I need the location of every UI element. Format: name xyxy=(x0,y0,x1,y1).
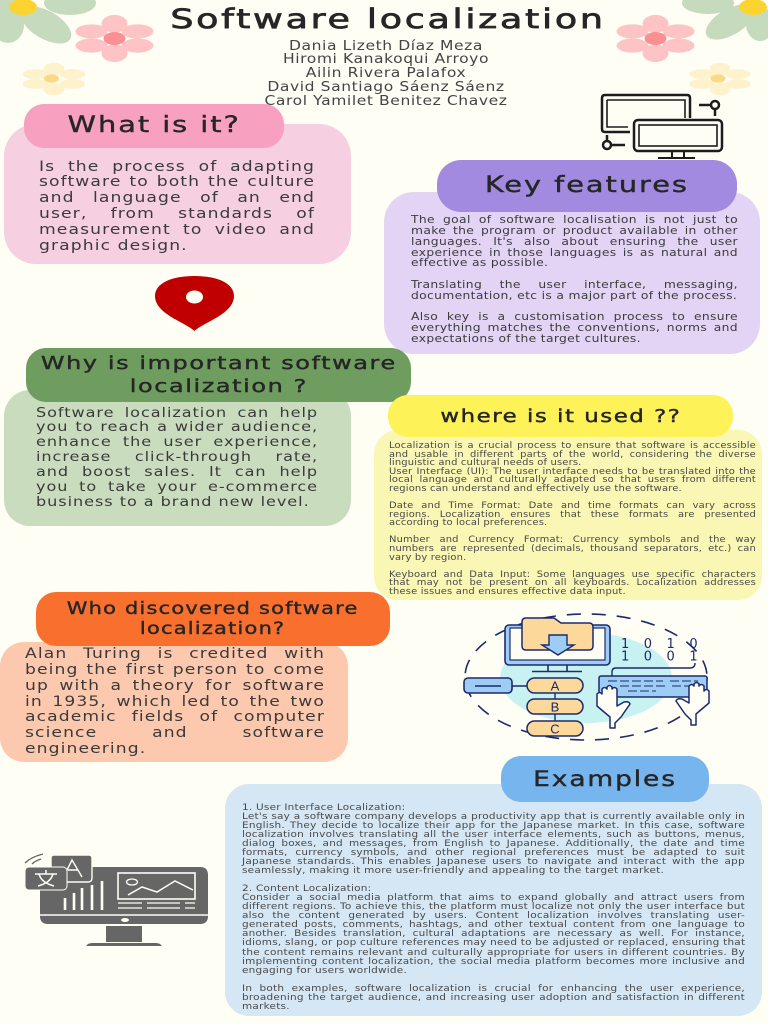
panel: key features xyxy=(384,160,760,354)
heading: Why is important software xyxy=(41,353,396,374)
text block: implementing content localization, the social media platform becomes more inclusive and xyxy=(242,956,745,967)
text block: Software localization can help xyxy=(36,404,318,420)
text block: English. They decide to localize their app for the Japanese market. In this case, software xyxy=(242,820,745,831)
panel: where is it used xyxy=(374,395,762,600)
text block: linguistic and cultural needs of users. xyxy=(389,458,581,468)
text block: and language of an end xyxy=(39,190,315,206)
text block: business to a brand new level. xyxy=(36,494,310,510)
icon: translation monitor xyxy=(24,853,208,946)
text block: formats, currency symbols, and other regional preferences must be adapted to suit xyxy=(242,847,745,858)
text block: Let's say a software company develops a productivity app that is currently available only in xyxy=(242,811,745,822)
text block: documentation, etc is a major part of the process. xyxy=(411,289,737,302)
text block: you to reach a wider audience, xyxy=(36,419,318,435)
keyboard xyxy=(612,663,695,676)
options xyxy=(527,678,583,693)
text block: software to both the culture xyxy=(39,174,315,190)
text block: the content remains relevant and culturally appropriate for users in different countries. By xyxy=(242,946,745,958)
heading xyxy=(26,348,411,402)
heading: Who discovered software xyxy=(67,598,359,618)
authors xyxy=(264,38,508,109)
text block: being the first person to come xyxy=(25,662,325,678)
icon: localization workflow: 1001 xyxy=(621,650,712,664)
text block: vary by region. xyxy=(389,553,466,563)
text block xyxy=(241,802,745,1012)
authors: David Santiago Sáenz Sáenz xyxy=(267,79,505,95)
text block: dialog boxes, and messages, from English to Japanese. Additionally, the date and time xyxy=(242,838,745,849)
decorative flowers xyxy=(0,0,768,96)
title: Software localization xyxy=(170,4,606,35)
text block: everything matches the conventions, norms and xyxy=(411,321,738,334)
icon: localization workflow: B xyxy=(551,700,559,714)
blob xyxy=(500,633,672,723)
binary: 1010 xyxy=(621,637,712,652)
text block: engineering. xyxy=(25,741,146,757)
icon: two monitors xyxy=(600,94,724,159)
text block: languages. It's also about ensuring the user xyxy=(411,235,738,248)
text block: effective as possible. xyxy=(411,256,548,269)
text block: local language and culturally adapted so that users from different xyxy=(389,475,756,485)
text block: according to local preferences. xyxy=(389,518,547,528)
text block: different regions. To achieve this, the platform must localize not only the user interface but xyxy=(242,901,745,912)
text block: up with a theory for software xyxy=(25,678,325,694)
panel background xyxy=(4,390,351,526)
text block: regions. Localization ensures that these formats are presented xyxy=(389,510,756,520)
text block: Also key is a customisation process to ensure xyxy=(411,310,738,323)
heading xyxy=(388,395,733,437)
heading: localization? xyxy=(140,619,286,639)
text block: science and software xyxy=(25,725,325,741)
hands xyxy=(597,686,630,728)
icon: localization workflow xyxy=(463,613,712,741)
text block: enhance the user experience, xyxy=(36,434,318,450)
text block: measurement to video and xyxy=(39,222,315,238)
text block: that may not be present on all keyboards. Localization addresses xyxy=(389,578,756,588)
text block xyxy=(389,441,756,597)
text block: user, from standards of xyxy=(39,206,315,222)
text block: Localization is a crucial process to ensure that software is accessible xyxy=(389,441,756,451)
text block: and boost sales. It can help xyxy=(36,464,318,480)
text block: make the program or product available in other xyxy=(411,224,738,237)
text block: Number and Currency Format: Currency symbols and the way xyxy=(389,535,756,545)
label box xyxy=(464,678,512,693)
text block: expectations of the target cultures. xyxy=(411,332,641,345)
panel background xyxy=(384,192,760,354)
icon: location pin xyxy=(155,276,234,331)
text block: graphic design. xyxy=(39,238,188,254)
panel: who discovered xyxy=(0,592,390,762)
text block: Consider a social media platform that aims to expand globally and attract users from xyxy=(242,892,745,903)
text block: you to take your e-commerce xyxy=(36,479,318,495)
heading: where is it used ?? xyxy=(440,406,681,426)
text block: academic fields of computer xyxy=(25,709,325,725)
text block: in 1935, which led to the two xyxy=(25,694,325,710)
panel background xyxy=(0,642,348,762)
text block: The goal of software localisation is not just to xyxy=(411,213,738,226)
text block: User Interface (UI): The user interface needs to be translated into the xyxy=(389,467,756,477)
heading: Key features xyxy=(485,172,689,198)
text block: Keyboard and Data Input: Some languages use specific characters xyxy=(389,570,756,580)
dashed ring xyxy=(465,614,707,740)
heading xyxy=(24,104,284,146)
text block: localization involves translating all the user interface elements, such as buttons, menus, xyxy=(242,829,745,840)
panel background xyxy=(374,430,762,600)
authors: Dania Lizeth Díaz Meza xyxy=(289,38,483,54)
text block: seamlessly, making it more user-friendly and appealing to the target market. xyxy=(242,865,664,876)
text block: 2. Content Localization: xyxy=(242,883,371,894)
text block: Translating the user interface, messaging, xyxy=(411,278,738,291)
text block: In both examples, software localization is crucial for enhancing the user experience, xyxy=(242,983,745,994)
authors: Hiromi Kanakoqui Arroyo xyxy=(283,51,489,67)
panel: what is it xyxy=(4,104,351,264)
text block: increase click-through rate, xyxy=(36,449,318,465)
panel: why is it important xyxy=(4,348,411,526)
text block: numbers are represented (decimals, thousand separators, etc.) can xyxy=(389,544,756,554)
heading xyxy=(36,592,390,646)
heading: Examples xyxy=(533,767,677,791)
text block: engaging for users worldwide. xyxy=(242,965,407,976)
panel background xyxy=(4,124,351,264)
text block: generated posts, comments, hashtags, and other textual content from one language to xyxy=(242,919,745,930)
text block xyxy=(410,213,738,345)
heading: What is it? xyxy=(67,112,241,138)
text block: and usable in different parts of the world, considering the diverse xyxy=(389,450,756,460)
text block: markets. xyxy=(242,1001,290,1012)
text block: idioms, slang, or pop culture references may need to be adjusted or replaced, ensuring that xyxy=(242,937,745,948)
text block: 1. User Interface Localization: xyxy=(242,802,405,812)
panel background xyxy=(225,784,762,1016)
text block xyxy=(25,646,325,757)
authors: Ailin Rivera Palafox xyxy=(306,65,466,81)
text block: another. Besides translation, cultural adaptations are necessary as well. For instance, xyxy=(242,928,745,939)
text block: experience in those languages is as natural and xyxy=(411,246,738,259)
text block: Alan Turing is credited with xyxy=(25,646,325,662)
panel: examples xyxy=(225,756,762,1016)
monitor xyxy=(505,625,610,665)
text block xyxy=(36,404,318,510)
folder xyxy=(522,618,593,650)
heading xyxy=(437,160,737,210)
heading: localization ? xyxy=(129,376,308,397)
heading xyxy=(501,756,709,802)
text block xyxy=(39,158,315,254)
authors: Carol Yamilet Benitez Chavez xyxy=(264,93,508,109)
icon: localization workflow: A xyxy=(551,678,560,694)
text block: broadening the target audience, and increasing user adoption and satisfaction in different xyxy=(242,992,745,1003)
icon: localization workflow: C xyxy=(550,722,560,736)
text block: these issues and ensures effective data input. xyxy=(389,587,626,597)
text block: Is the process of adapting xyxy=(39,158,315,174)
text block: Japanese standards. This enables Japanese users to navigate and interact with the app xyxy=(242,856,745,867)
text block: also the content generated by users. Content localization involves translating user- xyxy=(242,910,745,921)
text block: Date and Time Format: Date and time formats can vary across xyxy=(389,501,756,511)
text block: regions can understand and effectively use the software. xyxy=(389,484,682,494)
